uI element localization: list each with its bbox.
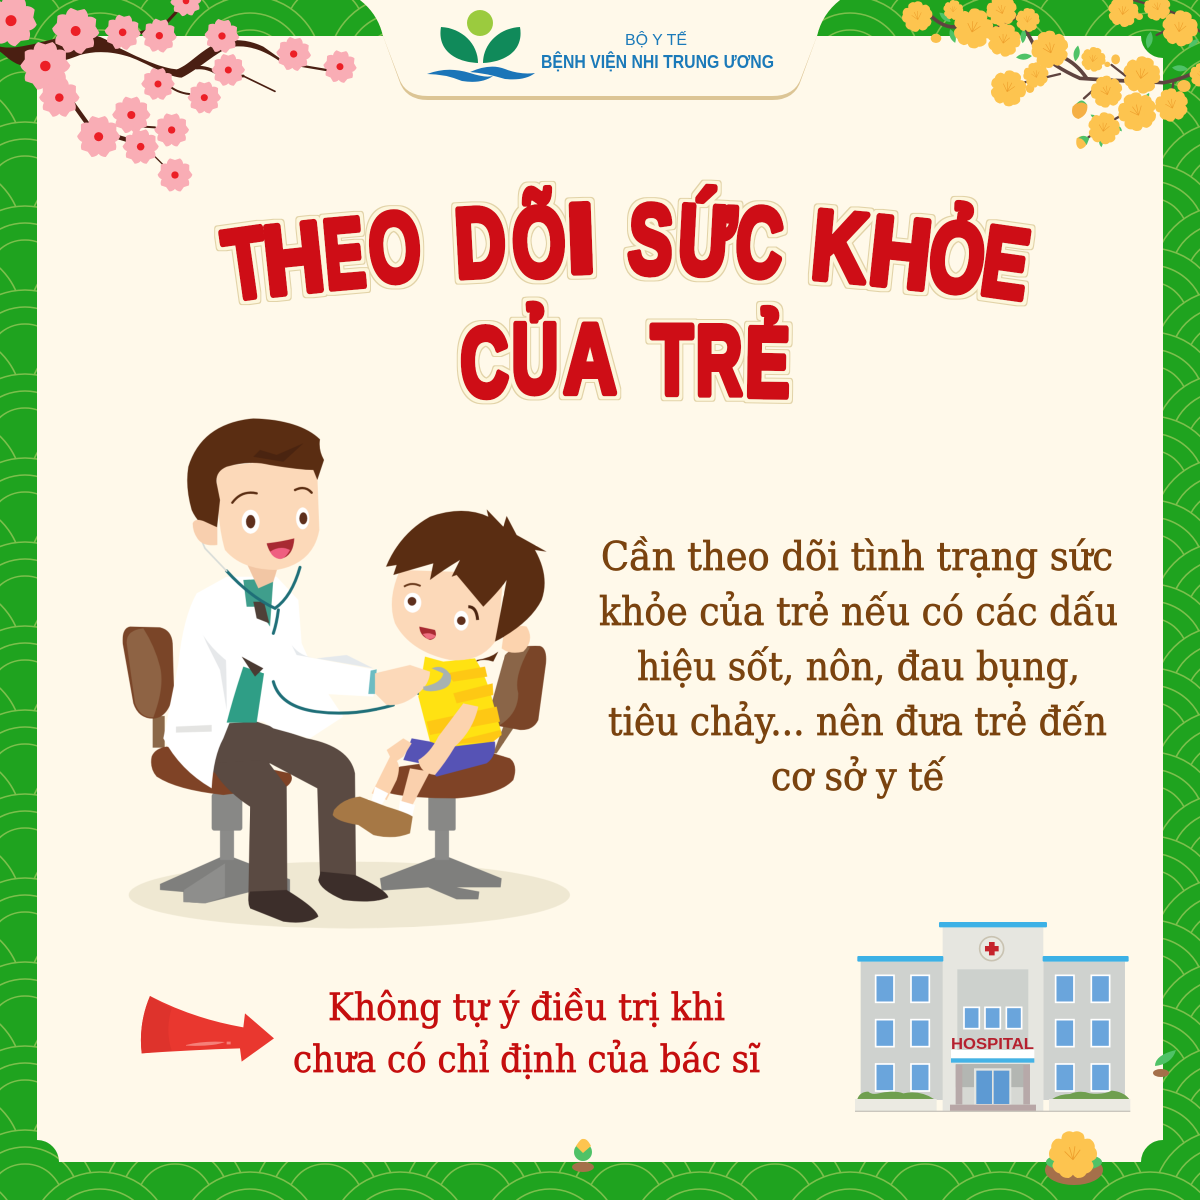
decoration: leaf on right border (1153, 1050, 1176, 1077)
child shirt (418, 657, 502, 747)
title: K (808, 189, 872, 304)
icon: red arrow (141, 996, 274, 1062)
stethoscope (200, 537, 435, 713)
title: Ủ (512, 303, 558, 413)
illustration: doctor examining child (123, 418, 570, 928)
header tab (360, 0, 840, 100)
title: C (732, 186, 786, 299)
child legs and shoe (333, 757, 430, 837)
title: Õ (510, 186, 567, 298)
body paragraph: tiêu chảy... nên đưa trẻ đến (608, 700, 1107, 745)
doctor shirt and tie (227, 578, 273, 723)
title: Ẻ (744, 307, 791, 417)
doctor coat (163, 577, 377, 788)
body paragraph: Cần theo dõi tình trạng sức (601, 535, 1113, 580)
right chair (380, 646, 546, 899)
child head (386, 509, 547, 662)
body paragraph: cơ sở y tế (771, 755, 946, 800)
title: I (565, 184, 597, 294)
title: D (452, 188, 509, 299)
title (217, 183, 1036, 417)
left chair (123, 627, 292, 903)
child shorts (403, 738, 495, 777)
decoration: apricot flower on bottom border (1045, 1131, 1103, 1185)
title: Ứ (675, 183, 739, 296)
decoration: yellow apricot branch (898, 0, 1200, 150)
doctor hand and chest piece (375, 665, 451, 705)
logo icon (427, 10, 535, 82)
decoration: bud on bottom border (572, 1139, 594, 1172)
logo: Bệnh viện Nhi Trung ương (427, 10, 774, 82)
title: T (651, 305, 693, 415)
hospital sign: HOSPITAL (951, 1036, 1034, 1053)
logo text: BỘ Y TẾ (625, 30, 687, 49)
warning text: Không tự ý điều trị khi (328, 986, 725, 1029)
title: H (864, 195, 936, 311)
title: R (696, 305, 742, 415)
title: H (258, 202, 329, 317)
title: T (217, 206, 274, 321)
decoration: pink cherry blossom branch (0, 0, 359, 193)
doctor shoes (248, 872, 388, 923)
title: C (459, 307, 509, 417)
doctor head (187, 418, 324, 588)
logo text: BỆNH VIỆN NHI TRUNG ƯƠNG (541, 51, 774, 72)
title: E (975, 204, 1036, 320)
icon: hospital building (855, 922, 1130, 1112)
warning text (293, 986, 760, 1081)
title: S (626, 183, 676, 295)
title: Ỏ (923, 200, 991, 316)
title: E (319, 198, 369, 310)
title: A (563, 306, 617, 414)
body paragraph: hiệu sốt, nôn, đau bụng, (637, 645, 1080, 690)
body paragraph: khỏe của trẻ nếu có các dấu (599, 590, 1118, 635)
child arm and hands (387, 703, 478, 775)
title: O (365, 191, 424, 304)
logo text (541, 30, 774, 72)
doctor trousers (209, 722, 356, 900)
warning text: chưa có chỉ định của bác sĩ (293, 1038, 760, 1081)
ground shadow (129, 862, 570, 928)
body paragraph (599, 535, 1118, 800)
